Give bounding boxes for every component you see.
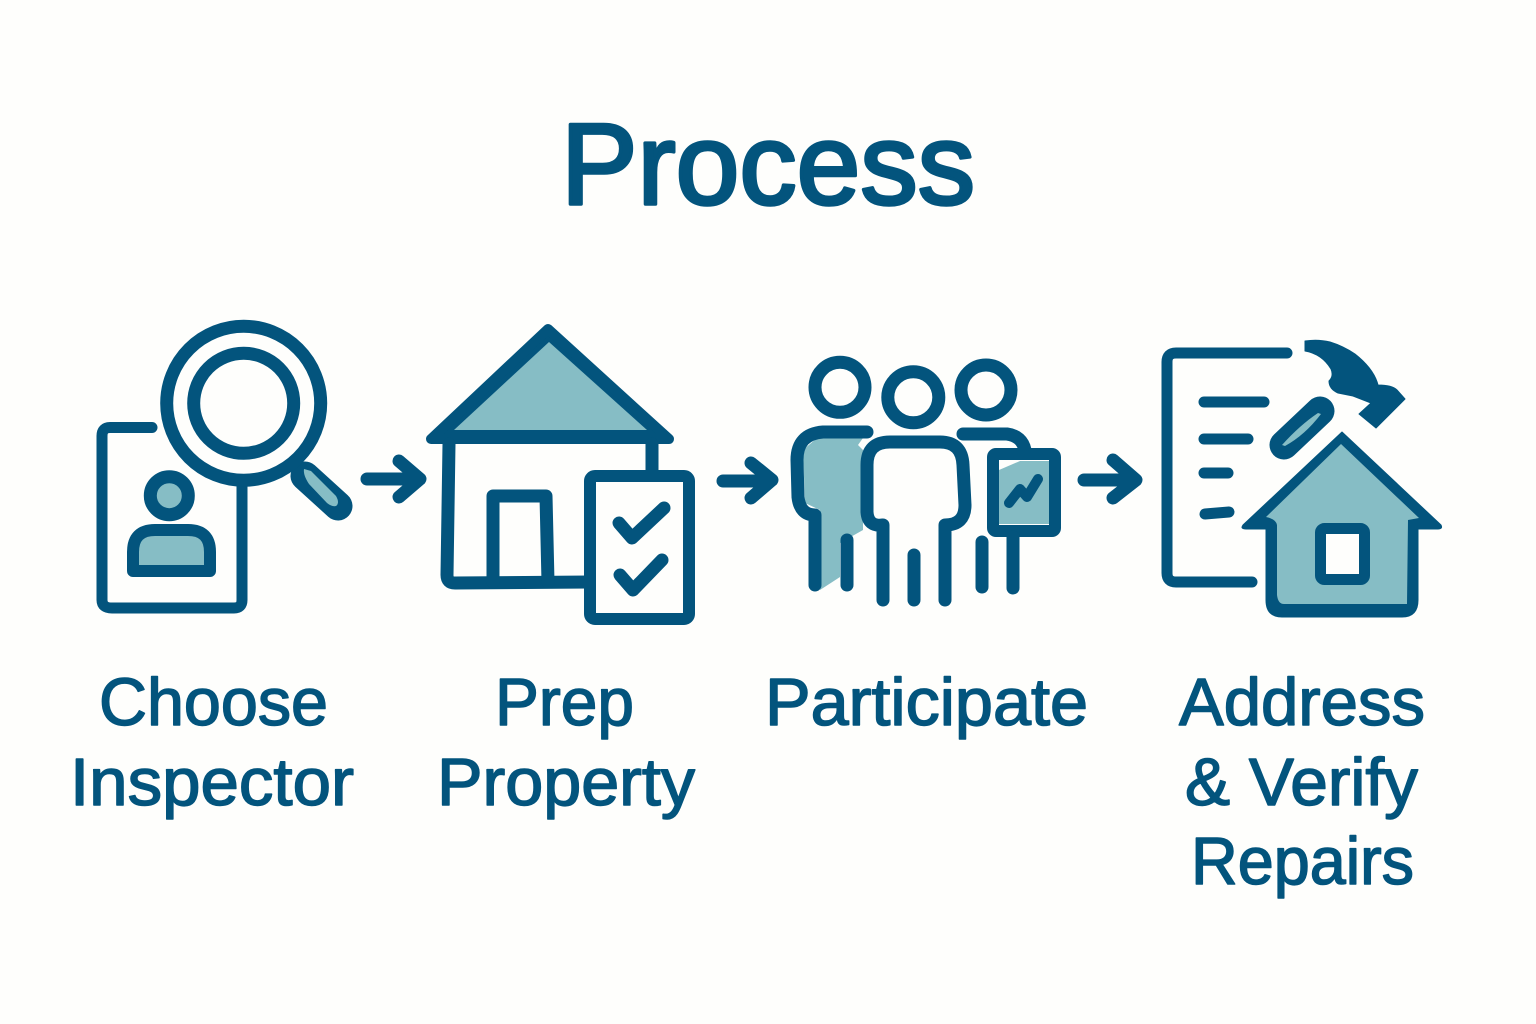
hammer handle (1282, 411, 1321, 446)
arrow 1 (367, 461, 420, 497)
hammer head (1305, 340, 1405, 428)
title: Process (561, 101, 975, 229)
house walls (447, 444, 652, 583)
icon: choose inspector (102, 326, 338, 608)
icon: address and verify repairs (1167, 340, 1442, 617)
right person with chart board (961, 365, 1055, 588)
label: prep property: Property (437, 745, 696, 820)
person head (150, 477, 188, 515)
door (493, 496, 548, 582)
label: prep property (437, 665, 696, 820)
label: address and verify repairs: Repairs (1191, 824, 1414, 899)
magnifying glass (167, 326, 338, 506)
document outline (1167, 353, 1287, 582)
left person (797, 362, 867, 590)
label: choose inspector: Inspector (70, 745, 354, 820)
middle person (867, 372, 965, 600)
label: address and verify repairs: Address (1179, 665, 1425, 740)
icon: prep property (431, 329, 689, 619)
arrow 2 (723, 463, 772, 498)
person body (133, 530, 210, 571)
label: choose inspector: Choose (99, 665, 328, 740)
small house (1242, 432, 1442, 617)
label: address and verify repairs (1179, 665, 1425, 899)
document lines (1204, 402, 1264, 514)
document outline (102, 428, 242, 608)
icon: participate (797, 362, 1055, 600)
label: choose inspector (70, 665, 354, 820)
arrow 3 (1084, 460, 1136, 498)
label: address and verify repairs: & Verify (1185, 745, 1418, 820)
label: prep property: Prep (495, 665, 634, 740)
label: participate: Participate (765, 665, 1088, 740)
checklist (590, 476, 689, 619)
roof (431, 329, 669, 439)
